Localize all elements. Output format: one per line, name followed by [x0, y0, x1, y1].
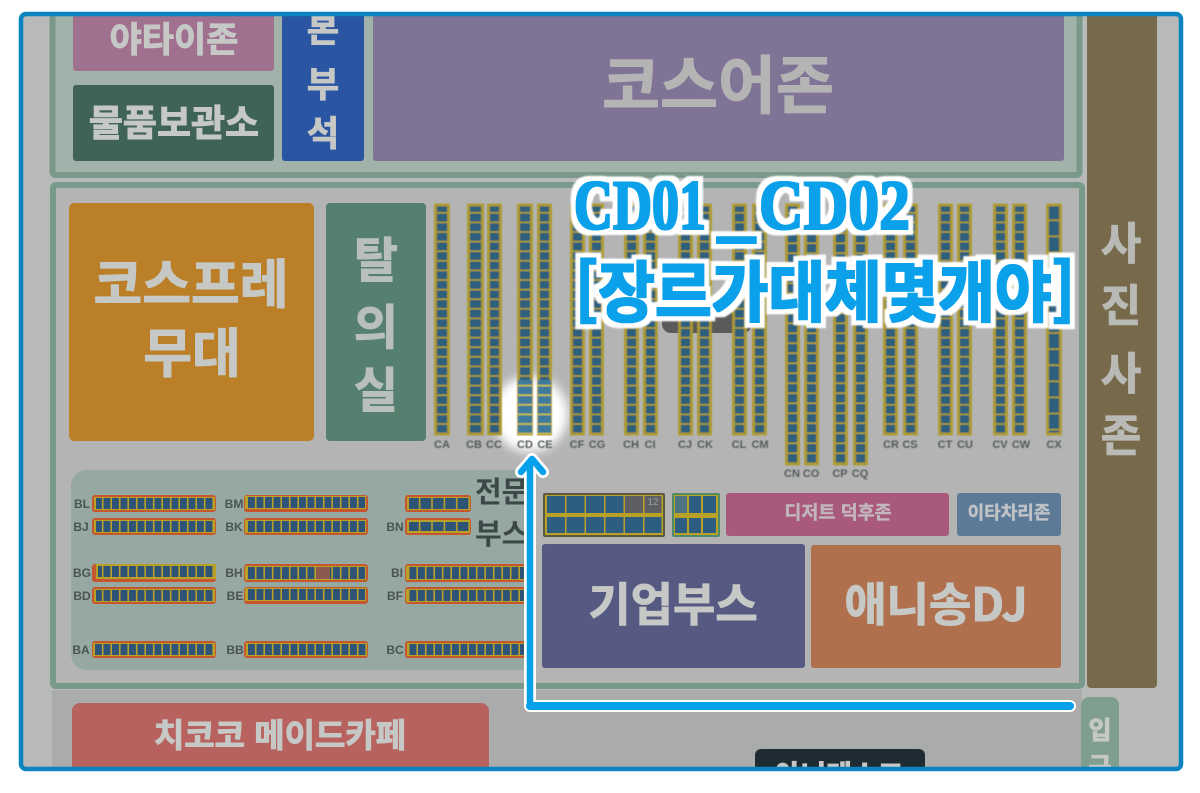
row BB: BB	[226, 643, 244, 657]
zone: 탈의실: 탈	[354, 221, 398, 291]
zone: 본부석: 석	[307, 106, 339, 157]
row BE	[227, 587, 368, 604]
column CP	[832, 205, 848, 480]
column CM: CM	[751, 439, 769, 451]
zone: 기업부스	[542, 544, 805, 668]
column CK: CK	[697, 439, 713, 451]
row BD: BD	[73, 589, 91, 603]
row BN: BN	[386, 520, 404, 534]
column CB	[466, 205, 482, 451]
column CN	[784, 205, 800, 480]
zone: 물품보관소: 물품보관소	[89, 93, 259, 147]
row BK	[225, 518, 368, 535]
column CF	[570, 205, 585, 451]
row BM	[225, 495, 368, 512]
column CX: CX	[1046, 439, 1062, 451]
zone: 입구	[1081, 697, 1119, 787]
row BI: BI	[391, 566, 403, 580]
zone: 코스어존	[373, 6, 1064, 161]
row BJ: BJ	[73, 520, 89, 534]
zone: 야타이존: 야타이존	[110, 12, 238, 63]
column CB: CB	[466, 439, 482, 451]
column CW: CW	[1012, 439, 1031, 451]
column CG: CG	[589, 439, 605, 451]
row BC	[386, 641, 537, 658]
row BL: BL	[74, 497, 90, 511]
column CR: CR	[883, 439, 899, 451]
zone: 물품보관소	[73, 85, 274, 161]
panel: main hall	[53, 185, 1082, 686]
booth block: 6 seats	[672, 493, 720, 537]
row BM: BM	[225, 497, 243, 511]
column CP: CP	[832, 468, 848, 480]
zone: 탈의실: 실	[354, 351, 398, 421]
zone: 이타차리존	[957, 493, 1061, 536]
column CE	[537, 205, 553, 451]
column CS: CS	[902, 439, 918, 451]
booth heading: 전문	[475, 469, 528, 511]
zone: 사진사존: 사	[1101, 208, 1141, 272]
row BD	[73, 587, 216, 604]
zone: 탈의실	[326, 203, 426, 441]
zone: 기업부스: 기업부스	[588, 569, 758, 635]
zone: 애니송DJ: 애니송DJ	[844, 569, 1028, 635]
column CR	[883, 205, 899, 451]
title: booth code: CD02	[759, 167, 910, 245]
column CJ: CJ	[678, 439, 692, 451]
title: booth code	[574, 145, 910, 245]
row BA: BA	[72, 643, 90, 657]
zone: 사진사존: 사	[1101, 338, 1141, 402]
column CU: CU	[957, 439, 973, 451]
panel: top hall	[52, 0, 1080, 175]
arrow: route to CD	[521, 459, 1070, 706]
highlight glow	[492, 376, 568, 452]
column CE: CE	[537, 439, 553, 451]
column CL: CL	[732, 439, 747, 451]
zone: 야타이존	[73, 16, 274, 71]
column CO: CO	[803, 468, 820, 480]
zone: 본부석: 부	[307, 57, 339, 108]
zone: 본부석	[282, 2, 364, 161]
zone: 디저트 덕후존	[726, 493, 949, 536]
panel: booth area	[71, 469, 551, 670]
zone: 코스프레 무대	[69, 203, 314, 441]
row BK: BK	[225, 520, 243, 534]
column CD: CD	[517, 439, 533, 451]
column CT	[938, 205, 953, 451]
column CW	[1012, 205, 1031, 451]
column CJ	[678, 205, 692, 451]
highlighted seats CD CE	[518, 380, 551, 434]
booth heading: 부스	[475, 511, 528, 553]
column CM	[751, 205, 769, 451]
seat columns	[434, 205, 1062, 480]
row BE: BE	[227, 589, 243, 603]
dark logo behind seats	[662, 312, 752, 333]
column CA	[434, 205, 450, 451]
title: booth code: _	[717, 145, 756, 245]
zone: 사진사존: 진	[1101, 270, 1141, 334]
column CS	[902, 205, 918, 451]
row BI	[391, 564, 536, 582]
column CH: CH	[623, 439, 639, 451]
row unnamed	[405, 495, 471, 512]
column CG	[589, 205, 605, 451]
row BG	[73, 564, 216, 582]
zone: 이타차리존: 이타차리존	[968, 499, 1050, 525]
column CT: CT	[938, 439, 953, 451]
row BF	[387, 587, 536, 604]
booth block: 12 seats: 12	[647, 497, 659, 508]
zone: 사진사존: 존	[1101, 400, 1141, 464]
row BH	[225, 564, 368, 582]
column CU	[957, 205, 973, 451]
zone: 본부석: 본	[307, 2, 339, 53]
zone: 사진사존	[1087, 6, 1157, 688]
zone: 입구: 입	[1088, 711, 1112, 747]
column CD	[517, 205, 533, 451]
zone: 애니송DJ	[811, 545, 1061, 668]
row BN	[386, 518, 471, 535]
zone: 코스프레 무대: 코스프레	[93, 243, 289, 319]
title: genre name: [장르가대체몇개야]	[575, 240, 1075, 336]
zone: 치코코 메이드카페: 치코코 메이드카페	[154, 709, 406, 757]
column CI	[644, 205, 656, 451]
column CF: CF	[570, 439, 585, 451]
row BJ	[73, 518, 216, 535]
row BH: BH	[225, 566, 243, 580]
row BF: BF	[387, 589, 403, 603]
column CN: CN	[784, 468, 800, 480]
column CH	[623, 205, 639, 451]
column CC: CC	[486, 439, 502, 451]
column CI: CI	[644, 439, 656, 451]
title: booth code: CD01	[574, 167, 706, 245]
zone: 아니메스크: 아니메스크	[775, 754, 903, 793]
zone: 디저트 덕후존: 디저트 덕후존	[784, 499, 892, 525]
row BB	[226, 641, 368, 658]
column CV: CV	[992, 439, 1008, 451]
row BC: BC	[386, 643, 404, 657]
booth block: 12 seats	[543, 493, 665, 537]
column CL	[732, 205, 747, 451]
column CV	[992, 205, 1008, 451]
column CK	[697, 205, 713, 451]
zone: 코스어존: 코스어존	[602, 36, 834, 127]
booth heading	[476, 478, 524, 547]
column CO	[803, 205, 820, 480]
row BL	[74, 495, 216, 512]
zone: 탈의실: 의	[354, 288, 398, 358]
column CC	[486, 205, 502, 451]
column CQ: CQ	[852, 468, 869, 480]
row BA	[72, 641, 216, 658]
zone: 입구: 구	[1088, 747, 1112, 783]
column CA: CA	[434, 439, 450, 451]
zone: 치코코 메이드카페	[72, 703, 489, 773]
column CQ	[852, 205, 869, 480]
column CX	[1046, 205, 1062, 451]
zone: 코스프레 무대: 무대	[143, 312, 241, 388]
row BG: BG	[73, 566, 91, 580]
zone: 아니메스크	[755, 749, 925, 793]
